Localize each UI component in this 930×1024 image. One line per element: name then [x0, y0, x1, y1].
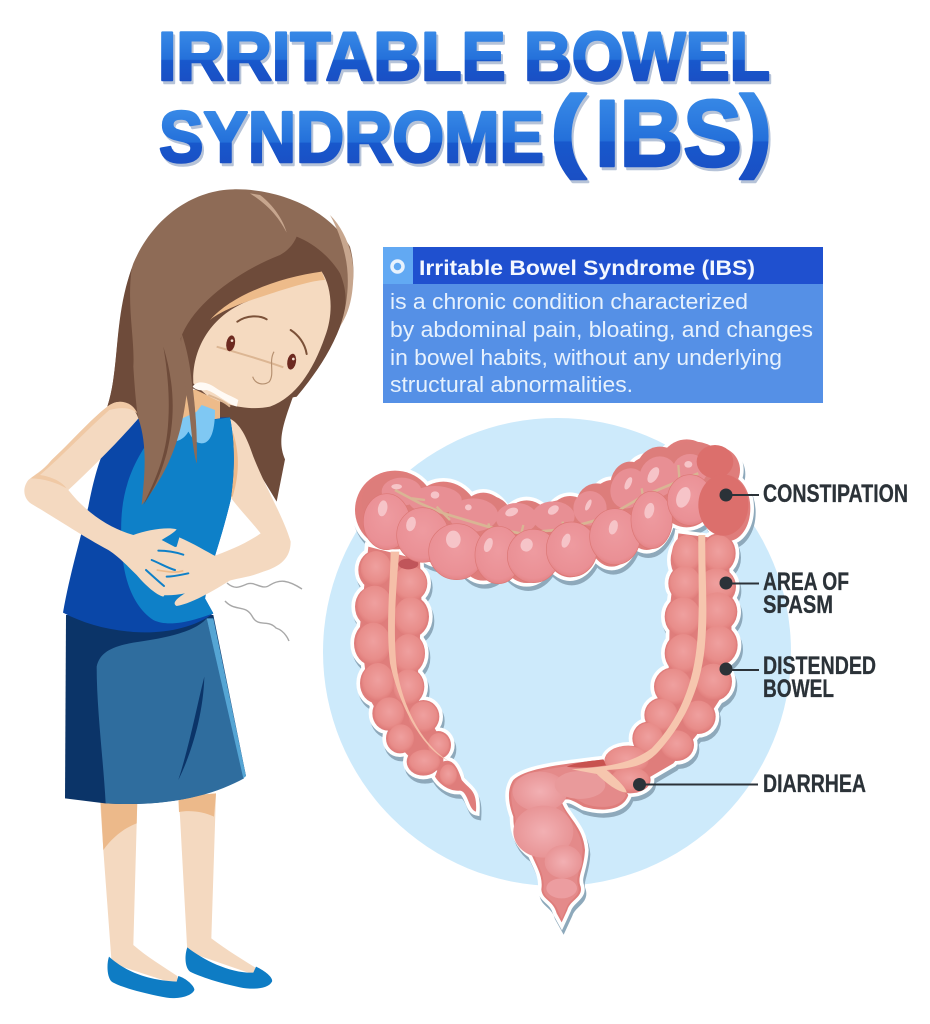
label: BOWEL [763, 675, 834, 703]
definition body text [390, 289, 813, 397]
colon illustration [354, 439, 752, 927]
rectum [511, 759, 626, 919]
marker dot [633, 778, 646, 791]
collar [170, 405, 215, 443]
blouse [63, 417, 234, 632]
skirt [65, 615, 246, 804]
definition body text: by abdominal pain, bloating, and changes [390, 317, 813, 342]
hair highlight [250, 193, 353, 327]
ascending colon segments [356, 551, 457, 786]
legs, skirt and shoes [65, 615, 272, 998]
label [763, 652, 876, 703]
right leg [178, 793, 255, 975]
title [158, 18, 772, 187]
main hair [107, 189, 353, 505]
label: DISTENDED [763, 652, 876, 680]
label: AREA OF [763, 568, 849, 596]
back hair [215, 387, 297, 502]
upper body [24, 189, 353, 632]
title line 2: SYNDROME [159, 98, 544, 178]
eye crease [217, 347, 283, 367]
face [193, 272, 331, 408]
title abbreviation: IBS [595, 81, 742, 187]
definition body text: in bowel habits, without any underlying [390, 345, 782, 370]
title abbreviation: ( [550, 78, 586, 180]
title line 1: IRRITABLE BOWEL [158, 18, 770, 95]
woman with stomach pain [24, 189, 353, 998]
splenic flexure end [697, 445, 748, 536]
transverse colon back row [362, 442, 723, 535]
title abbreviation [550, 78, 772, 187]
far arm [212, 418, 291, 583]
pouch highlights [377, 461, 693, 554]
clasped hands [146, 537, 233, 606]
ascending colon band [388, 552, 448, 761]
near arm [24, 402, 193, 597]
forehead shadow [210, 272, 325, 320]
right shoe [186, 947, 272, 989]
annotation: diarrhea [633, 770, 866, 798]
definition heading: Irritable Bowel Syndrome (IBS) [419, 256, 755, 280]
annotation: distended bowel [720, 652, 876, 703]
front hair strand [181, 333, 197, 463]
transverse colon upper pouches [382, 450, 707, 534]
eyes [225, 335, 297, 370]
panel: definition box [383, 247, 823, 403]
hair shadow [107, 237, 346, 505]
descending colon segments [605, 535, 736, 791]
label: SPASM [763, 591, 833, 619]
title abbreviation: ) [740, 78, 772, 180]
transverse colon front pouches [363, 475, 713, 584]
left leg [100, 800, 178, 985]
marker dot [720, 662, 732, 676]
label [763, 568, 849, 619]
transverse colon band [395, 465, 698, 538]
light blue background circle [323, 418, 791, 886]
left shoe [107, 957, 194, 998]
descending colon band [572, 535, 706, 793]
neck [172, 387, 220, 425]
nose [253, 352, 274, 384]
annotation: area of spasm [720, 568, 849, 619]
motion lines [225, 581, 302, 641]
marker dot [720, 488, 732, 502]
definition body text: is a chronic condition characterized [390, 289, 748, 314]
annotation: constipation [720, 480, 908, 508]
definition body text: structural abnormalities. [390, 372, 633, 397]
marker dot [720, 576, 732, 590]
eyebrows [237, 316, 307, 354]
icon: bullet ring [392, 261, 403, 272]
mouth [193, 382, 238, 407]
label: DIARRHEA [763, 770, 866, 798]
